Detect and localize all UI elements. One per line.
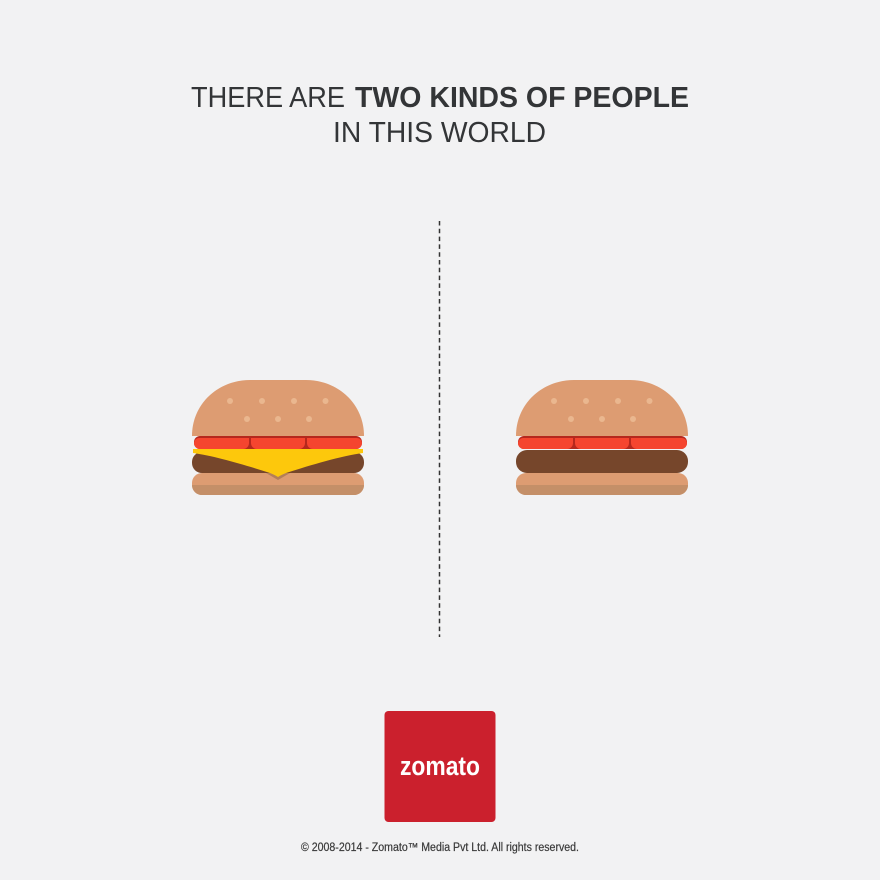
sesame seeds (227, 398, 328, 422)
sesame seeds (551, 398, 652, 422)
top bun (192, 380, 364, 436)
copyright footer: © 2008-2014 - Zomato™ Media Pvt Ltd. All rights reserved. (301, 842, 579, 854)
logo: zomato: zomato (400, 751, 480, 781)
bottom bun (516, 473, 688, 495)
cheese shadow (266, 473, 290, 480)
tomato slices (518, 436, 687, 449)
logo: zomato (384, 711, 496, 822)
title: TWO KINDS OF PEOPLE (355, 82, 689, 114)
icon: burger without cheese (516, 380, 688, 495)
title: IN THIS WORLD (333, 117, 546, 149)
cheese (193, 449, 363, 477)
patty (192, 452, 364, 473)
bottom bun (192, 473, 364, 495)
title (191, 82, 689, 149)
tomato slices (194, 436, 362, 449)
dashed divider (438, 221, 440, 637)
patty (516, 450, 688, 473)
title: THERE ARE (191, 82, 345, 114)
icon: cheeseburger (192, 380, 364, 495)
top bun (516, 380, 688, 436)
